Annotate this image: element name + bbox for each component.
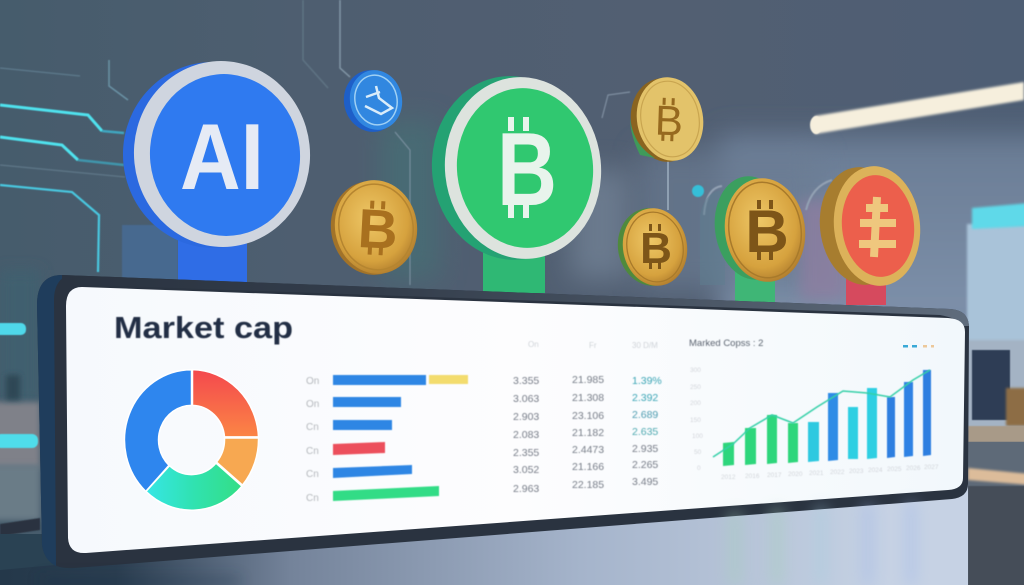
row 5 — [306, 465, 412, 480]
row 3 — [306, 420, 392, 433]
column 2: 22.185 — [572, 479, 604, 491]
green stem — [483, 250, 545, 293]
y axis labels: 250 — [690, 384, 701, 391]
column 1: 3.052 — [513, 464, 539, 476]
left glow bars — [0, 323, 38, 448]
column 3: 2.392 — [632, 392, 658, 404]
red coin badge — [806, 162, 926, 305]
row 1 — [306, 375, 468, 387]
coin glyph — [365, 86, 392, 114]
y axis labels: 200 — [690, 400, 701, 407]
row 5: Cn — [306, 469, 319, 480]
y axis labels — [690, 367, 703, 472]
bitcoin symbol: B — [356, 197, 399, 261]
column 2: 21.985 — [572, 374, 604, 386]
row 6 — [306, 486, 439, 504]
column 1 — [513, 375, 539, 495]
columns — [723, 370, 931, 466]
row 3: Cn — [306, 422, 319, 433]
column 1: 2.355 — [513, 447, 539, 459]
x axis labels: 2024 — [868, 467, 883, 474]
ceiling lamp — [810, 82, 1024, 134]
y axis labels: 0 — [697, 465, 701, 472]
table header: 30 D/M — [632, 341, 658, 350]
floor — [0, 480, 968, 585]
row 4 — [306, 442, 385, 457]
x axis labels: 2025 — [887, 466, 902, 473]
y axis labels: 100 — [692, 433, 703, 440]
panel bezel — [37, 275, 969, 568]
x axis labels — [721, 464, 939, 481]
x axis labels: 2026 — [906, 465, 921, 472]
column 3: 2.635 — [632, 426, 658, 438]
AI stem — [178, 240, 247, 284]
table header — [528, 340, 658, 350]
column 2 — [572, 374, 604, 491]
x axis labels: 2020 — [788, 471, 803, 478]
right wall and window — [967, 203, 1024, 585]
y axis labels: 50 — [694, 449, 702, 456]
y axis labels: 300 — [690, 367, 701, 374]
horizontal bar chart — [306, 375, 468, 504]
bitcoin symbol: B — [497, 112, 557, 228]
chart title: Marked Copss : 2 — [689, 338, 763, 349]
bitcoin symbol: B — [745, 198, 789, 265]
circuit lines — [0, 0, 630, 285]
AI badge — [114, 52, 319, 284]
chart legend — [903, 345, 934, 348]
column 1: 2.963 — [513, 483, 539, 495]
table header: On — [528, 340, 539, 349]
cyan dot — [692, 185, 704, 197]
gold coin stem — [735, 270, 775, 302]
x axis labels: 2016 — [745, 473, 760, 480]
gold coin lower left — [323, 174, 425, 281]
row 6: Cn — [306, 493, 319, 504]
donut chart — [124, 370, 259, 510]
x axis labels: 2027 — [924, 464, 939, 471]
column 2: 21.166 — [572, 461, 604, 473]
column 3: 2.689 — [632, 409, 658, 421]
trend line — [713, 370, 930, 457]
column 2: 21.182 — [572, 427, 604, 439]
column 1: 2.083 — [513, 429, 539, 441]
gold coin with green stand — [700, 171, 812, 302]
x axis labels: 2017 — [767, 472, 782, 479]
column 1: 2.903 — [513, 411, 539, 423]
AI lettering: AI — [180, 104, 264, 209]
panel screen — [66, 287, 965, 553]
green bitcoin badge — [423, 68, 610, 293]
x axis labels: 2023 — [849, 468, 864, 475]
dashboard panel — [37, 275, 969, 568]
column 3: 3.495 — [632, 476, 658, 488]
gold coin top — [624, 72, 710, 210]
column 3: 2.935 — [632, 443, 658, 455]
y axis labels: 150 — [690, 417, 701, 424]
column 2: 21.308 — [572, 392, 604, 404]
heading: Market cap — [114, 310, 293, 345]
column and line chart — [689, 338, 939, 481]
column 3 — [632, 375, 662, 488]
x axis labels: 2021 — [809, 470, 824, 477]
x axis labels: 2022 — [830, 469, 845, 476]
gold coin bottom — [612, 203, 693, 291]
red coin glyph — [859, 197, 896, 257]
column 2: 23.106 — [572, 410, 604, 422]
row 1: On — [306, 376, 319, 387]
data table — [513, 340, 662, 495]
column 1: 3.355 — [513, 375, 539, 387]
row 2 — [306, 397, 401, 410]
column 3: 2.265 — [632, 459, 658, 471]
table header: Fr — [589, 341, 597, 350]
small blue coin — [338, 65, 408, 137]
column 3: 1.39% — [632, 375, 662, 387]
table reflection — [40, 502, 917, 585]
column 2: 2.4473 — [572, 444, 604, 456]
red stem — [846, 275, 886, 305]
x axis labels: 2012 — [721, 474, 736, 481]
row 4: Cn — [306, 446, 319, 457]
row 2: On — [306, 399, 319, 410]
bitcoin symbol: B — [640, 224, 672, 273]
bitcoin symbol: B — [654, 97, 684, 145]
column 1: 3.063 — [513, 393, 539, 405]
